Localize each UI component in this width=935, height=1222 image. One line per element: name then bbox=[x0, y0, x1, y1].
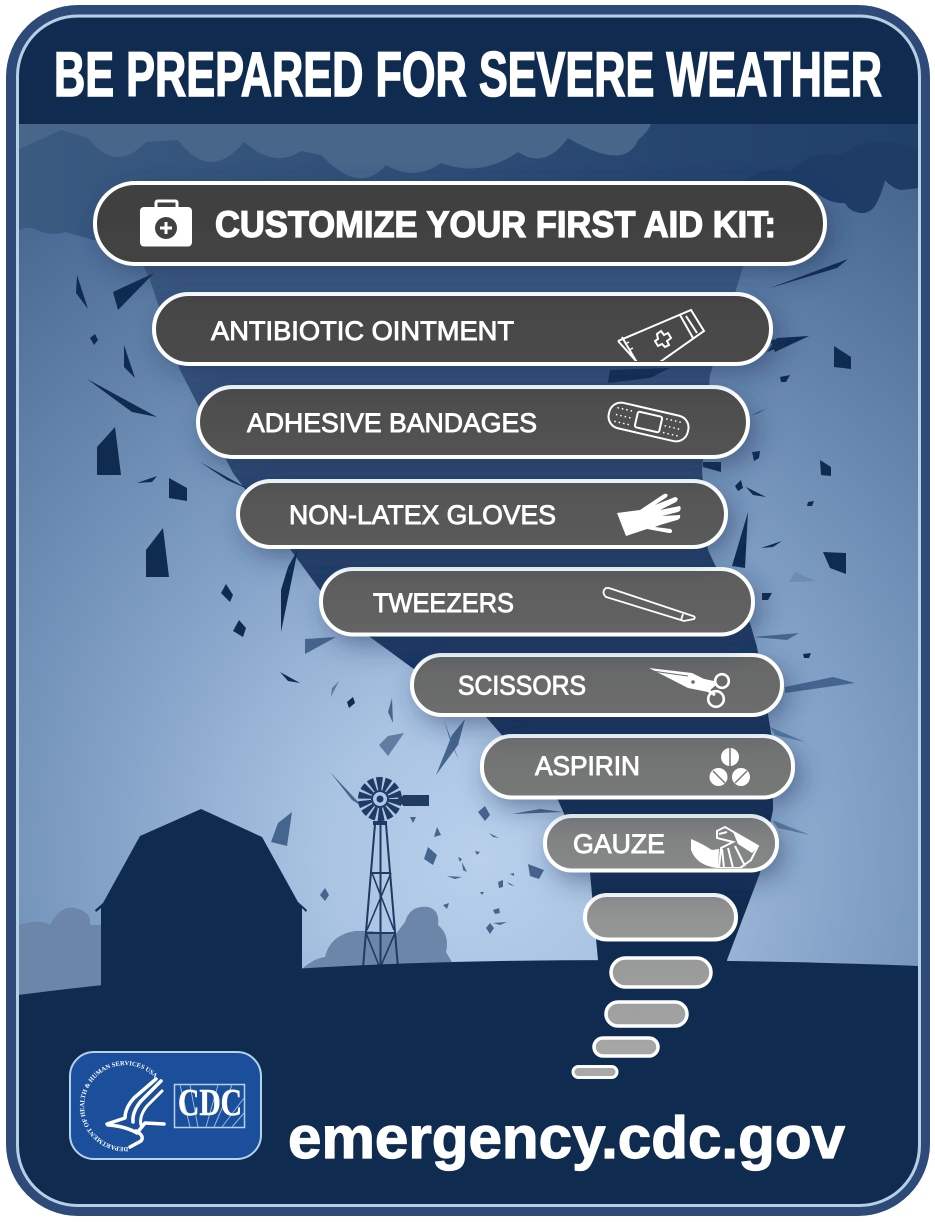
label: antibiotic ointment: ANTIBIOTIC OINTMENT bbox=[211, 316, 514, 346]
icon: first aid kit bbox=[140, 201, 192, 246]
logo: HHS and CDC bbox=[69, 1051, 262, 1160]
icon: ointment tube bbox=[618, 310, 704, 362]
pill: gauze bbox=[545, 816, 777, 870]
pill: customize your first aid kit bbox=[95, 183, 825, 264]
pill: tweezers bbox=[321, 569, 753, 634]
heading: customize your first aid kit: CUSTOMIZE YOUR FIRST AID KIT: bbox=[215, 204, 776, 245]
barn silhouette bbox=[95, 809, 307, 1000]
title band bbox=[19, 18, 918, 124]
label: non-latex gloves: NON-LATEX GLOVES bbox=[289, 500, 556, 530]
icon: glove bbox=[617, 494, 681, 536]
HHS ring text bbox=[84, 1065, 154, 1147]
tornado funnel bbox=[125, 225, 773, 960]
ground bbox=[18, 960, 918, 1210]
label: adhesive bandages: ADHESIVE BANDAGES bbox=[247, 408, 537, 438]
icon: tweezers bbox=[604, 588, 695, 621]
icon: scissors bbox=[649, 668, 729, 707]
logo: HHS and CDC: DEPARTMENT OF HEALTH & HUMAN SERVICES USA bbox=[80, 1060, 156, 1152]
HHS eagle bbox=[107, 1079, 164, 1147]
label: aspirin: ASPIRIN bbox=[535, 751, 640, 781]
funnel base over ground bbox=[598, 960, 727, 961]
windmill bbox=[330, 772, 429, 968]
pill: non-latex gloves bbox=[238, 481, 726, 547]
label: scissors: SCISSORS bbox=[458, 670, 586, 700]
label: gauze: GAUZE bbox=[573, 829, 665, 859]
distant bushes bbox=[19, 907, 452, 1000]
storm clouds bbox=[18, 124, 918, 240]
flying debris: dark bbox=[76, 259, 851, 708]
website address: emergency.cdc.gov bbox=[288, 1105, 845, 1171]
pill: adhesive bandages bbox=[198, 387, 748, 457]
flying debris: mid tone bbox=[271, 572, 855, 934]
icon: aspirin tablets bbox=[710, 748, 750, 786]
label: tweezers: TWEEZERS bbox=[373, 588, 514, 618]
CDC mark: CDC bbox=[178, 1082, 242, 1124]
icon: bandage bbox=[606, 400, 691, 444]
pill: antibiotic ointment bbox=[154, 294, 771, 364]
pill: aspirin bbox=[482, 736, 793, 798]
icon: gauze bbox=[691, 827, 758, 868]
pill: scissors bbox=[412, 655, 782, 715]
bottom tail pills bbox=[573, 895, 736, 1078]
